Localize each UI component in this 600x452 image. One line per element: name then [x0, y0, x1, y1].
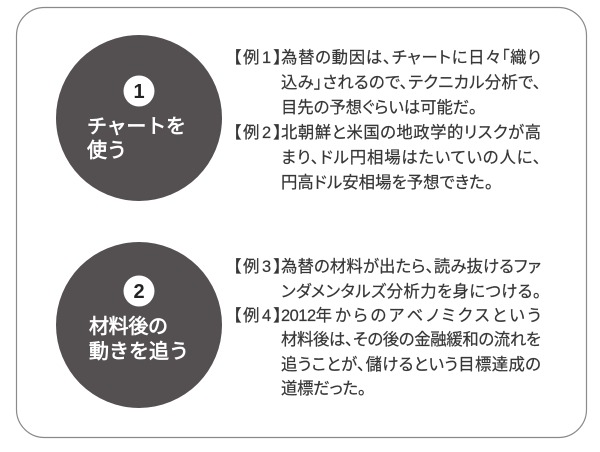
example 2: まり、ドル円相場はたいていの人に、 — [281, 149, 541, 167]
example 3: 為替の材料が出たら、読み抜けるファ — [281, 258, 541, 276]
example 4 — [233, 307, 541, 398]
example 4: 2012年 — [281, 307, 332, 325]
circle 1 heading — [87, 116, 186, 162]
circle 1 heading: 使う — [87, 139, 127, 162]
circle 1 background — [56, 35, 222, 201]
number 1 badge: 1 — [133, 81, 145, 103]
example 2: 北朝鮮と米国の地政学的リスクが高 — [281, 124, 541, 142]
example 2: 】 — [273, 124, 282, 142]
example 4: 道標だった。 — [281, 380, 366, 398]
example 4: 例 — [243, 307, 259, 325]
example 2: 円高ドル安相場を予想できた。 — [281, 174, 493, 192]
example 3: ンダメンタルズ分析力を身につける。 — [281, 283, 541, 301]
example 1: 例 — [243, 49, 259, 67]
example 4: 4 — [262, 307, 271, 325]
section 2: examples text — [233, 258, 541, 398]
circle 2 heading — [89, 315, 189, 363]
example 3: 3 — [262, 258, 271, 276]
example 3: 【 — [233, 258, 241, 276]
circle 2 heading: 動きを追う — [89, 340, 189, 363]
example 1: 目先の予想ぐらいは可能だ。 — [281, 99, 477, 117]
example 3 — [233, 258, 541, 301]
example 2: 2 — [262, 124, 271, 142]
example 2: 例 — [243, 124, 259, 142]
circle 2 background — [56, 242, 222, 408]
circle 1 heading: チャートを — [87, 116, 186, 138]
example 4: 追うことが、儲けるという目標達成の — [281, 356, 541, 374]
section 1: examples text — [233, 49, 541, 192]
example 1: 為替の動因は、チャートに日々「織り — [281, 49, 541, 67]
section 1: circle badge — [56, 35, 222, 201]
section 2: circle badge — [56, 242, 222, 408]
example 3: 】 — [273, 258, 282, 276]
example 1: 】 — [273, 49, 282, 67]
example 1: 込み」されるので、テクニカル分析で、 — [281, 74, 541, 92]
example 4: 】 — [273, 307, 282, 325]
example 3: 例 — [243, 258, 259, 276]
example 4: 材料後は、その後の金融緩和の流れを — [281, 331, 541, 349]
example 2: 【 — [233, 124, 241, 142]
number 1 badge — [124, 76, 154, 106]
circle 2 heading: 材料後の — [89, 315, 168, 338]
example 4: からのアベノミクスという — [335, 307, 541, 325]
example 1: 【 — [233, 49, 241, 67]
number 2 badge — [124, 276, 154, 306]
example 1: 1 — [262, 49, 271, 67]
number 2 badge: 2 — [133, 281, 145, 303]
example 4: 【 — [233, 307, 241, 325]
example 1 — [233, 49, 541, 117]
example 2 — [233, 124, 541, 192]
